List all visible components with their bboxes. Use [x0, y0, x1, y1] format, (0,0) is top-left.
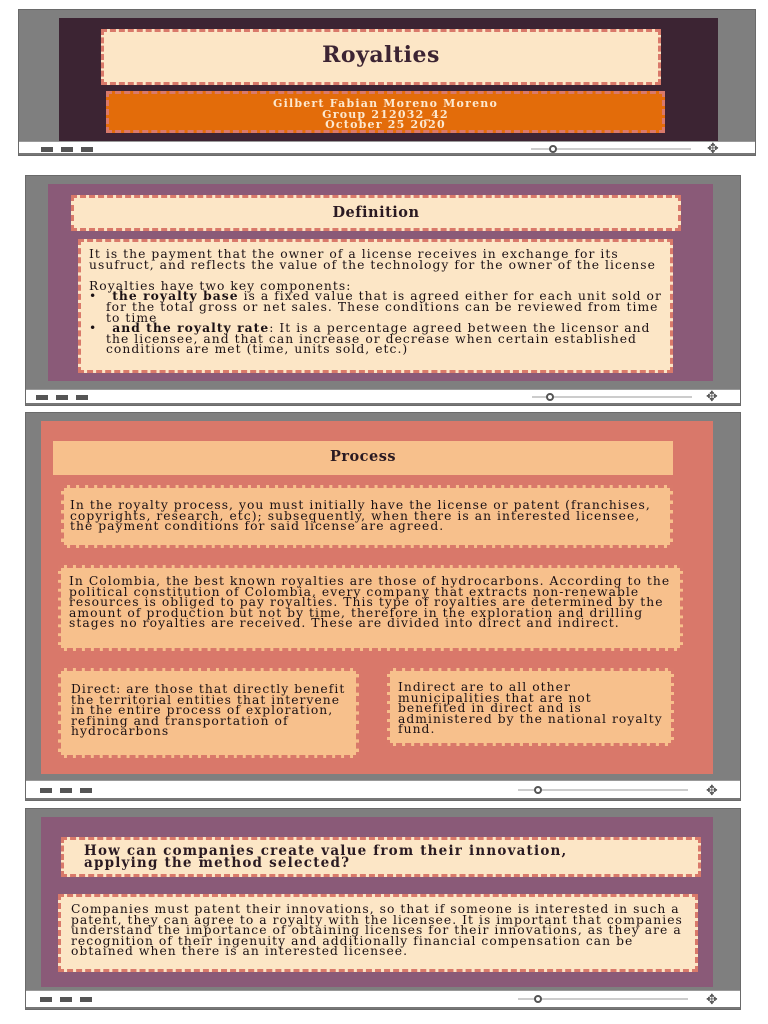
text: licensing process: In the royalty process, you must initially have the license or patent (franchises, copyrights, research, etc); subsequently, when there is an interested licensee, the payment conditions for said license are agreed. [70, 498, 651, 533]
control bar: ✥ [706, 992, 718, 1008]
text: licensing process [61, 485, 673, 548]
salmon panel [41, 421, 713, 774]
purple panel [48, 184, 713, 381]
control bar: ✥ [706, 783, 718, 799]
control bar: ✥ [706, 389, 718, 405]
author box [106, 91, 665, 133]
text: direct: Direct: are those that directly benefit the territorial entities that intervene in the entire process of exploration, refining and transportation of hydrocarbons [71, 682, 345, 738]
definition text [78, 239, 673, 373]
definition text: • the royalty base is a fixed value that is agreed either for each unit sold or for the total gross or net sales. These conditions can be reviewed from time to time [89, 288, 662, 325]
control bar [26, 389, 740, 405]
heading: Process: Process [330, 448, 396, 465]
author box: October 25 2020 [325, 118, 446, 131]
author box: Group 212032_42 [322, 108, 449, 120]
definition text: It is the payment that the owner of a license receives in exchange for its usufruct, and reflects the value of the technology for the owner of the license [89, 247, 656, 272]
slide 4: value creation [25, 808, 741, 1010]
title box [101, 29, 661, 85]
text: Colombia hydrocarbons: In Colombia, the best known royalties are those of hydrocarbons. According to the political constitution of Colombia, every company that extracts non-renewable resources is obliged to pay royalties. This type of royalties are determined by the amount of production but not by time, therefore in the exploration and drilling stages no royalties are received. These are divided into direct and indirect. [69, 574, 670, 630]
heading: Definition: Definition [332, 204, 420, 221]
text: direct [58, 668, 359, 758]
text: indirect: Indirect are to all other municipalities that are not benefited in direct and is administered by the national royalty fund. [398, 680, 663, 736]
slide 3: process [25, 412, 741, 801]
question heading: applying the method selected? [84, 855, 350, 871]
control bar: ✥ [707, 141, 719, 157]
definition text: • and the royalty rate: It is a percentage agreed between the licensor and the licensee, and that can increase or decrease when certain established conditions are met (time, units sold, etc.) [89, 320, 650, 356]
question heading: How can companies create value from their innovation, [84, 843, 567, 859]
slide 1: title [18, 9, 756, 156]
definition text: Royalties have two key components: [89, 279, 351, 293]
dark background panel [59, 18, 718, 141]
author box: Gilbert Fabian Moreno Moreno [273, 97, 498, 110]
control bar [19, 141, 755, 155]
answer text: Companies must patent their innovations, so that if someone is interested in such a patent, they can agree to a royalty with the licensee. It is important that companies understand the importance of obtaining licenses for their innovations, as they are a recognition of their ingenuity and additionally financial compensation can be obtained when there is an interested licensee. [71, 902, 683, 958]
control bar [26, 990, 740, 1009]
purple panel [41, 817, 713, 987]
answer text [58, 894, 698, 972]
text: Colombia hydrocarbons [58, 565, 683, 651]
title box: Royalties [322, 42, 440, 68]
question heading [61, 837, 701, 877]
heading: Definition [71, 195, 681, 231]
control bar [26, 780, 740, 800]
slide 2: definition [25, 175, 741, 406]
text: indirect [387, 668, 674, 746]
heading: Process [53, 441, 673, 475]
